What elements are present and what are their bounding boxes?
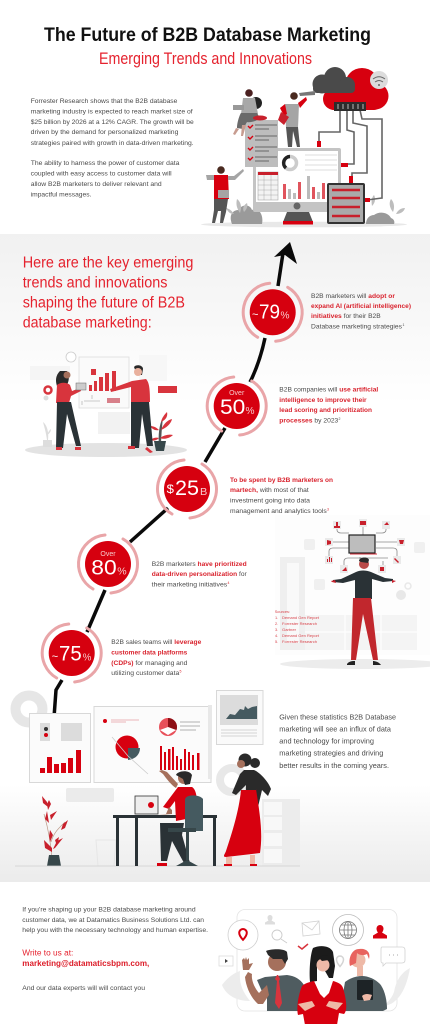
- woman with tablet: [340, 976, 387, 1011]
- illustration: team reviewing dashboards: [15, 690, 300, 866]
- wifi badge: [370, 71, 388, 89]
- conclusion text: better results in the coming years.: [279, 761, 389, 770]
- laptop: [349, 535, 375, 553]
- section heading: shaping the future of B2B: [23, 295, 185, 312]
- stat: ~79%: [243, 283, 302, 341]
- red bars: [160, 746, 200, 770]
- footer text: help you with the necessary technology and human expertise.: [22, 927, 208, 934]
- stat: ~75%: %: [83, 652, 91, 664]
- filing cabinet: [262, 799, 300, 866]
- title: The Future of B2B Database Marketing: [44, 24, 371, 46]
- text: over 80%: data-driven personalization for: [152, 571, 247, 578]
- person icon gray: [265, 915, 275, 924]
- intro text block: coupled with easy access to customer data will: [31, 170, 172, 178]
- footer text: If you’re shaping up your B2B database marketing around: [22, 906, 196, 914]
- stat: ~79%: %: [280, 310, 290, 322]
- magnifier: [272, 930, 287, 943]
- text: ~79%: Database marketing strategies: [311, 324, 403, 330]
- sources list: Forrester Research: [282, 621, 317, 626]
- conclusion text: Given these statistics B2B Database: [279, 712, 396, 721]
- text: over 50%: B2B companies will use artificial: [279, 386, 378, 394]
- text: $25B: investment going into data: [230, 498, 310, 504]
- seated woman: [245, 89, 253, 97]
- pin gray: [336, 956, 344, 966]
- text: ~75%: 5: [180, 670, 182, 674]
- dashboard panel centre: [94, 706, 211, 782]
- stat: $25B: $: [167, 482, 174, 496]
- stat: $25B: [158, 460, 216, 518]
- footer text: [22, 906, 208, 992]
- text: over 50%: intelligence to improve their: [279, 397, 367, 404]
- illustration: cloud data and monitor: [201, 67, 407, 227]
- standing man with laptop: [217, 166, 225, 174]
- man: [134, 365, 143, 375]
- text: $25B: martech, with most of that: [230, 487, 309, 494]
- office chair: [185, 795, 203, 831]
- sources list: 1.: [275, 615, 278, 620]
- stat: over 80%: [79, 535, 137, 593]
- bar chart: [283, 182, 325, 199]
- data table: [258, 172, 278, 200]
- red plant: [159, 417, 163, 447]
- checklist: [245, 120, 278, 167]
- sources list: Forrester Research: [282, 639, 317, 644]
- stat: ~75%: ~: [52, 651, 58, 663]
- stat: over 50%: 50: [220, 396, 245, 419]
- text: ~75%: (CDPs) for managing and: [111, 660, 188, 667]
- woman: [56, 371, 69, 386]
- stat: over 50%: %: [246, 406, 255, 417]
- location bubble: [228, 920, 258, 950]
- stat: ~75%: [42, 624, 101, 682]
- text: ~79%: 1: [402, 323, 404, 327]
- network icons: [325, 519, 405, 573]
- pie chart: [116, 736, 138, 758]
- intro text block: allow B2B marketers to deliver relevant and: [31, 181, 162, 188]
- stat: $25B: B: [200, 487, 208, 498]
- telescope man: [290, 92, 298, 100]
- text: $25B: management and analytics tools: [230, 508, 327, 515]
- dark cloud: [312, 67, 355, 94]
- report panel: [216, 690, 263, 744]
- footer text: And our data experts will will contact you: [22, 985, 145, 992]
- stat: ~79%: 79: [259, 302, 280, 324]
- badge: [158, 386, 177, 393]
- person: [359, 559, 369, 569]
- man waving: [257, 975, 304, 1011]
- sources list: 5.: [275, 639, 278, 644]
- text: ~79%: B2B marketers will adopt or: [311, 293, 395, 300]
- illustration: data experts team: [219, 910, 410, 1024]
- ground: [15, 865, 300, 867]
- globe bubble: [332, 914, 364, 946]
- person icon red: [373, 925, 387, 938]
- text: $25B: [230, 477, 333, 515]
- wastebasket: [96, 840, 116, 866]
- arrow head: [274, 242, 297, 264]
- section heading: database marketing:: [23, 314, 152, 331]
- red cloud: [323, 68, 388, 110]
- stat: ~75%: 75: [59, 642, 82, 666]
- section heading: trends and innovations: [23, 275, 168, 292]
- footer text: Write to us at:: [22, 948, 73, 958]
- text: ~75%: utilizing customer data: [111, 670, 180, 677]
- cables: [319, 110, 382, 200]
- dashboard panel left: [30, 714, 90, 782]
- footer text: marketing@datamaticsbpm.com,: [22, 959, 149, 968]
- sources list: 3.: [275, 627, 278, 632]
- monitor: [253, 148, 341, 212]
- intro text block: The ability to harness the power of customer data: [31, 160, 180, 167]
- sources list: [275, 609, 320, 644]
- stat: over 50%: Over: [229, 390, 245, 397]
- gear icon: [44, 386, 52, 394]
- gray donut: [16, 696, 42, 722]
- text: over 50%: [279, 386, 378, 424]
- section heading: [23, 255, 193, 331]
- text: over 80%: their marketing initiatives: [152, 582, 228, 588]
- illustration: analysts at chart board: [25, 352, 187, 457]
- stat: over 80%: Over: [100, 551, 116, 558]
- text: over 50%: processes by 2023: [279, 418, 339, 424]
- sources list: Gartner: [282, 627, 297, 632]
- intro text block: [31, 98, 194, 198]
- text: ~79%: expand AI (artificial intelligence): [311, 303, 411, 310]
- intro text block: impactful messages.: [31, 192, 92, 198]
- text: over 80%: [152, 561, 247, 588]
- text: ~79%: initiatives for their B2B: [311, 313, 381, 320]
- chart board: [79, 357, 129, 408]
- woman in red: [310, 946, 335, 982]
- text: $25B: 3: [327, 508, 329, 512]
- server rack: [327, 183, 365, 224]
- donut: [284, 156, 296, 170]
- illustration: man with connected laptop: [275, 515, 430, 669]
- text: over 80%: 4: [228, 581, 230, 585]
- conclusion text: [279, 712, 396, 770]
- envelope: [302, 921, 320, 936]
- intro text block: Forrester Research shows that the B2B database: [31, 98, 178, 105]
- small pie: [159, 718, 177, 736]
- intro text block: strategies paired with growth in data-driven marketing.: [31, 140, 194, 147]
- text: ~75%: [111, 639, 202, 677]
- growth arrow line: [40, 242, 297, 765]
- text: $25B: To be spent by B2B marketers on: [230, 477, 333, 484]
- text: ~75%: customer data platforms: [111, 650, 187, 656]
- stat: $25B: 25: [175, 477, 199, 500]
- pot plant: [43, 440, 52, 447]
- text: over 50%: lead scoring and prioritization: [279, 407, 372, 414]
- chat bubble: [381, 947, 405, 966]
- plant: [44, 814, 65, 860]
- desk: [113, 815, 217, 818]
- footer text: customer data, we at Datamatics Business Solutions Ltd. can: [22, 917, 204, 924]
- stat: over 50%: [207, 377, 266, 435]
- switch: [334, 102, 366, 111]
- video card: [219, 956, 233, 966]
- sources list: 2.: [275, 621, 278, 626]
- standing woman: [238, 754, 252, 766]
- stat: over 80%: 80: [91, 556, 117, 580]
- stat: over 80%: %: [117, 566, 127, 578]
- conclusion text: marketing will see an influx of data: [279, 725, 391, 734]
- check mark: [298, 944, 308, 949]
- laptop: [135, 796, 158, 814]
- man at desk: [178, 772, 190, 784]
- sources list: 4.: [275, 633, 278, 638]
- intro text block: $25 billion by 2026 at a 12% CAGR. The growth will be: [31, 119, 194, 126]
- sources list: Demand Gen Report: [282, 633, 320, 638]
- text: ~75%: B2B sales teams will leverage: [111, 639, 202, 646]
- conclusion text: and technology for improving: [279, 737, 374, 746]
- intro text block: driven by the demand for personalized marketing: [31, 129, 179, 136]
- stat: ~79%: ~: [252, 309, 258, 321]
- sources list: Demand Gen Report: [282, 615, 320, 620]
- subtitle: Emerging Trends and Innovations: [99, 50, 312, 68]
- text: over 50%: 2: [338, 417, 340, 421]
- sources list: Sources:: [275, 609, 290, 614]
- conclusion text: marketing strategies and driving: [279, 749, 383, 758]
- intro text block: marketing industry is expected to reach market size of: [31, 108, 193, 116]
- connector lines: [329, 523, 397, 567]
- section heading: Here are the key emerging: [23, 255, 193, 272]
- text: over 80%: B2B marketers have prioritized: [152, 561, 247, 568]
- text: ~79%: [311, 293, 411, 330]
